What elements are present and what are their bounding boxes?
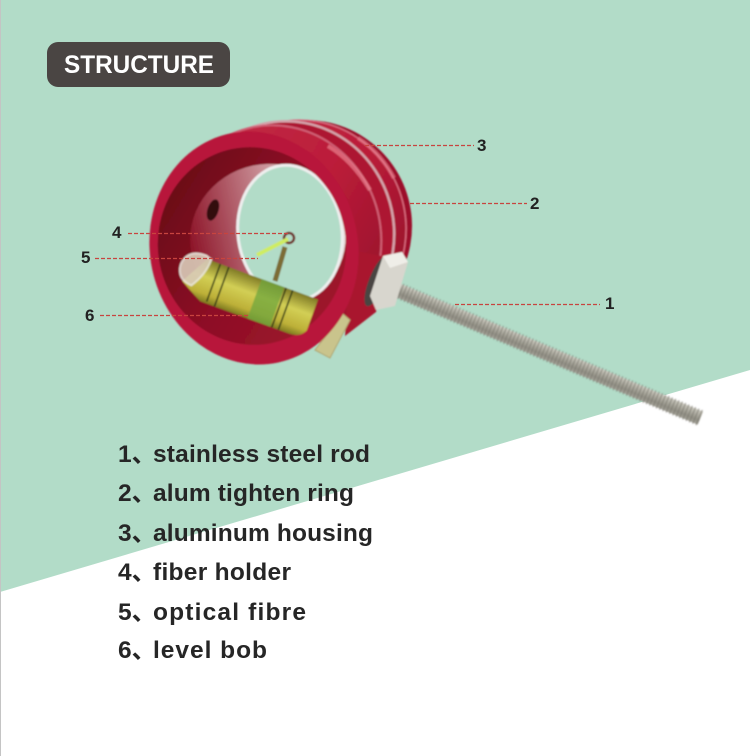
aluminum housing with ridges	[148, 100, 432, 371]
inner band and see-through hole	[190, 162, 347, 299]
callout lines: dashed leaders	[95, 146, 600, 316]
item 4: 4、	[118, 559, 156, 586]
optical fibre	[257, 239, 288, 255]
ring interior	[139, 130, 365, 362]
side hole	[204, 198, 222, 222]
item 2: alum tighten ring	[153, 480, 354, 507]
item 1: 1、	[118, 441, 156, 468]
callout numbers: 2	[530, 194, 539, 213]
callout numbers: 4	[112, 223, 122, 242]
heading badge: STRUCTURE	[47, 42, 230, 87]
mounting bracket	[315, 314, 350, 358]
item 3: 3、	[118, 520, 156, 547]
level bob tube	[171, 248, 319, 339]
parts list	[118, 441, 373, 664]
product photo: peep sight	[128, 100, 703, 425]
callout numbers: 5	[81, 248, 90, 267]
lower housing to nut	[345, 250, 392, 336]
item 4: fiber holder	[153, 559, 291, 586]
item 2: 2、	[118, 480, 156, 507]
stainless steel threaded rod	[387, 281, 703, 425]
callout numbers: 1	[605, 294, 614, 313]
heading badge: STRUCTURE: STRUCTURE	[64, 51, 214, 79]
item 1: stainless steel rod	[153, 441, 370, 468]
item 5: optical fibre	[153, 599, 306, 626]
fiber holder post	[275, 247, 285, 281]
item 5: 5、	[118, 599, 156, 626]
callout numbers	[81, 136, 614, 325]
item 6: 6、	[118, 637, 156, 664]
front red rim	[128, 112, 380, 384]
callout numbers: 3	[477, 136, 486, 155]
tighten nut and washer	[359, 252, 408, 310]
callout numbers: 6	[85, 306, 94, 325]
item 6: level bob	[153, 637, 267, 664]
item 3: aluminum housing	[153, 520, 373, 547]
